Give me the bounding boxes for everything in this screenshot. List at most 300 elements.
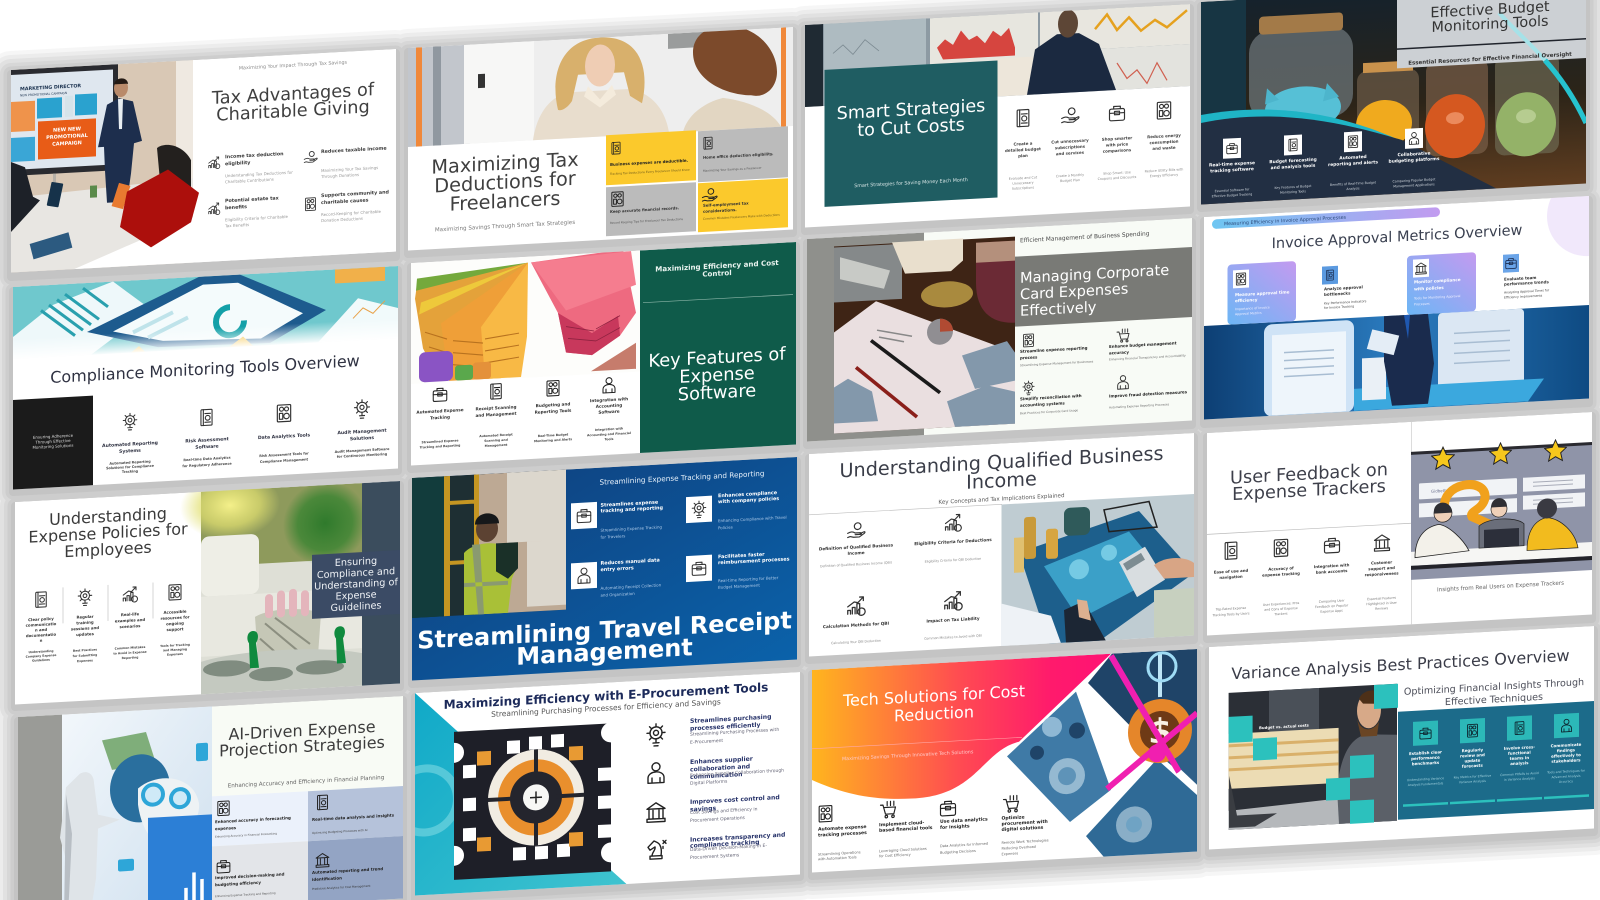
column: integration [1314, 538, 1350, 614]
column: budgeting [534, 380, 572, 443]
item: streamlines expense [571, 498, 663, 541]
column: real-life: to Avoid in Expense [113, 650, 147, 656]
illustration: documents and tablet [13, 266, 398, 360]
tile: business expenses: Business expenses are deductible. [610, 158, 689, 167]
panel: teal title box: Smart Strategies for Saving Money Each Month [854, 177, 968, 189]
column: collaborative: Comparing Popular Budget [1393, 177, 1435, 184]
column: create budget: Subscriptions [1012, 186, 1034, 191]
column: data analytics [258, 403, 310, 464]
title: Management [516, 633, 693, 671]
column: review forecasts: update [1464, 758, 1481, 763]
tile: business expenses [606, 130, 696, 185]
tile: self-employment [698, 178, 788, 232]
photo: businessman viewing charts [805, 3, 1190, 107]
panel: Tech Solutions for Cost Reduction [812, 649, 1197, 873]
panel: Tax Advantages of Charitable Giving [11, 49, 396, 273]
card: measure approval: efficiency [1235, 297, 1258, 303]
title: Deductions for [434, 167, 576, 198]
column: review forecasts: Regularly [1462, 747, 1483, 753]
column: integration: Software [598, 409, 620, 415]
item: implement cloud: Leveraging Cloud Solutions [879, 847, 927, 853]
column: accuracy: Accuracy of [1268, 565, 1294, 572]
panel: Maximizing Tax Deductions for Freelancers [408, 22, 793, 251]
tile: self-employment: Self-employment tax [703, 200, 749, 208]
column: integration: bank accounts [1316, 568, 1348, 575]
column: integration: Comparing User [1319, 599, 1344, 604]
item: optimize procurement: digital solutions [1002, 825, 1044, 833]
column: accuracy: expense tracking [1262, 571, 1300, 578]
column: accessible: Tools for Tracking [160, 642, 190, 648]
item: optimize procurement: Remote Work Technologies [1002, 838, 1049, 845]
title: Maximizing Efficiency with E-Procurement Tools [444, 680, 768, 712]
item: streamlines purchasing: Streamlining Purchasing Processes with [690, 728, 779, 738]
item: simplify: Simplify reconciliation with [1020, 393, 1082, 401]
column: integration: Tools [605, 437, 614, 441]
column: establish benchmarks [1403, 720, 1448, 807]
column: customer support: Highlighted in User [1366, 601, 1398, 606]
column: ease of use: Ease of use and [1214, 568, 1248, 575]
card: measure approval [1228, 261, 1296, 325]
card: monitor compliance: Monitor compliance [1414, 277, 1461, 285]
column: accuracy: and Cons of Expense [1264, 606, 1298, 612]
tile: automated reporting: Predictive Analytics for Cost Management [312, 884, 371, 891]
item: enhance budget: Enhancing Financial Transparency and Accountability [1109, 353, 1186, 362]
title: Income [966, 467, 1037, 494]
item: evaluate trends [1503, 252, 1550, 300]
column: integration [587, 377, 631, 442]
column: communicate findings: Advanced Analysis [1552, 774, 1581, 779]
panel: teal title box [824, 61, 998, 207]
item: streamlines purchasing: E-Procurement [690, 738, 723, 746]
item: streamlines expense: tracking and reporting [600, 505, 663, 515]
column: cross-functional: Common Pitfalls to Avoid [1500, 771, 1539, 777]
subtitle: Enhancing Accuracy and Efficiency in Financial Planning [228, 775, 385, 790]
column: create budget [1005, 109, 1041, 191]
item: reduces data errors: and Organization [600, 591, 635, 598]
column: regular training [71, 588, 99, 664]
item: potential estate tax: benefits [225, 204, 247, 211]
tile: home office [698, 126, 788, 182]
photo: calculator on digital tablet [1001, 494, 1194, 647]
photo: presenter in meeting room: PROMOTIONAL [46, 133, 89, 141]
column: data analytics: Risk Assessment Tools for [259, 451, 309, 458]
callout: compliance label: Guidelines [331, 600, 381, 614]
column: budgeting: Budgeting and [536, 401, 570, 408]
column: automated reporting: Systems [119, 448, 141, 455]
item: income tax deduction: Understanding Tax Deductions for [225, 170, 293, 178]
column: customer support: Reviews [1375, 606, 1388, 611]
callout: black side box [13, 396, 93, 490]
panel: Effective Budget Monitoring Tools [1201, 0, 1586, 205]
column: risk assessment: Risk Assessment [185, 437, 229, 445]
column: risk assessment: Software [195, 443, 219, 451]
item: definition [819, 521, 894, 568]
item: streamlines purchasing [647, 713, 779, 748]
item: evaluate trends: Evaluate team [1504, 275, 1536, 282]
panel: green side: Maximizing Efficiency and Cost [655, 258, 779, 274]
column: establish benchmarks: Establish clear [1409, 749, 1442, 756]
column: create budget: Evaluate and Cut [1009, 175, 1037, 181]
column: real-time expense: Essential Software for [1215, 187, 1249, 193]
column: establish benchmarks: Analysis Fundamentals [1408, 781, 1444, 787]
tile: improved decisions: Improved decision-making and [215, 871, 285, 880]
subtitle: Maximizing Savings Through Innovative Tech Solutions [842, 749, 974, 762]
item: enhances compliance [686, 490, 787, 532]
column: create budget: plan [1018, 153, 1028, 158]
column: clear policy: documentatio [26, 632, 56, 638]
item: analyze bottlenecks: for Invoice Tracking [1324, 304, 1354, 310]
tile: self-employment: Common Mistakes Freelancers Make with Deductions [703, 213, 780, 221]
tile: keep records: Record Keeping Tips for Freelancer Tax Deductions [610, 217, 684, 225]
panel: Understanding Qualified Business Income [809, 433, 1194, 657]
column: establish benchmarks: performance [1411, 755, 1440, 761]
column: automated reporting: Automated [1339, 155, 1367, 161]
item: improve fraud: Improve fraud detection measures [1109, 389, 1188, 399]
column: clear policy [26, 591, 57, 663]
subtitle: Streamlining Purchasing Processes for Efficiency and Savings [491, 697, 721, 719]
item: supports community: Supports community and [321, 190, 389, 199]
column: collaborative: Collaborative [1398, 151, 1430, 158]
column: automated expense: Automated Expense [416, 407, 464, 415]
column: real-time expense: Real-time expense [1209, 161, 1255, 169]
tile: real-time data: Optimizing Budgeting Processes with AI [312, 828, 368, 835]
column: cut subscriptions [1051, 107, 1089, 184]
title: Freelancers [450, 187, 560, 216]
column: integration: Accounting [596, 402, 622, 409]
callout: black side box: Ensuring Adherence [33, 433, 73, 440]
item: calculation: Calculating Your QBI Deduction [831, 639, 881, 645]
illustration: team with stars: Gidbeth [1431, 488, 1447, 494]
column: clear policy: n and [35, 627, 47, 633]
card: monitor compliance: with policies [1414, 285, 1444, 292]
photo: presenter in meeting room: NEW NEW [53, 126, 81, 134]
column: establish benchmarks: Understanding Variance [1407, 776, 1444, 782]
item: implement cloud: Implement cloud- [879, 821, 924, 828]
column: regular training: for Submitting [73, 653, 97, 658]
item: improves cost control: Improves cost control and [690, 794, 780, 806]
callout: compliance label: Ensuring [335, 556, 377, 569]
column: communicate findings: Accuracy [1559, 779, 1573, 784]
column: integration: Accounting and Financial [587, 431, 631, 437]
card: monitor compliance: Processes [1414, 302, 1430, 307]
column: automated reporting: Analysis [1346, 186, 1360, 191]
column: regular training: updates [76, 631, 95, 637]
panel: green side: Software [678, 380, 756, 405]
item: potential estate tax: Tax Benefits [224, 222, 249, 228]
column: cut subscriptions: and services [1056, 150, 1085, 156]
item: enhances supplier: Enhancing Supplier Collaboration through [690, 769, 784, 779]
item: impact [924, 590, 982, 641]
column: accuracy: Trackers [1273, 612, 1288, 616]
column: review forecasts: Key Metrics for Effective [1454, 774, 1491, 780]
panel: Variance Analysis Best Practices Overview [1209, 626, 1594, 850]
column: automated reporting: Tracking [122, 469, 139, 474]
photo: presenter in meeting room [11, 60, 193, 273]
item: simplify: Best Practices for Corporate Card Usage [1020, 408, 1078, 415]
column: integration: Integration with [590, 396, 628, 403]
item: streamlines expense: Streamlining Expense Tracking [600, 524, 662, 533]
panel: green side: Expense [679, 363, 755, 388]
column: automated reporting [102, 412, 158, 475]
illustration: gears in diamonds [1007, 649, 1197, 862]
callout: black side box: Monitoring Solutions [32, 443, 74, 450]
column: audit management [335, 398, 390, 459]
title: Maximizing Tax [431, 148, 579, 179]
column: automated reporting [1328, 130, 1378, 192]
column: budget forecasting [1269, 134, 1317, 195]
item: automate: with Automation Tools [818, 855, 857, 861]
item: automate: tracking processes [818, 830, 867, 839]
icon: stars [1432, 439, 1566, 469]
item: supports community: Record-Keeping for Charitable [321, 209, 381, 217]
subtitle: Maximizing Savings Through Smart Tax Strategies [435, 220, 575, 234]
column: receipt scanning: Management [485, 443, 508, 448]
item: increases transparency: Procurement Systems [690, 852, 740, 861]
column: customer support: Customer [1371, 559, 1392, 566]
panel: teal title box: to Cut Costs [857, 115, 965, 141]
tile: enhanced accuracy: Enhanced accuracy in forecasting [215, 815, 291, 824]
column: shop smarter: Shop smarter [1102, 135, 1132, 142]
column: communicate findings [1544, 712, 1589, 799]
kicker: Efficient Management of Business Spending [1020, 231, 1150, 244]
callout: compliance label: Compliance and [317, 566, 395, 581]
column: regular training: sessions and [71, 625, 99, 632]
title: Understanding Qualified Business [840, 442, 1163, 482]
shape: teal triangle [393, 681, 627, 897]
column: budgeting: Real-Time Budget [538, 432, 568, 438]
tile: automated reporting: Automated reporting and trend [312, 866, 383, 875]
item: income tax deduction: Income tax deduction [225, 152, 284, 160]
item: evaluate trends: Analyzing Approval Times for [1504, 288, 1549, 295]
panel: Smart Strategies to Cut Costs [805, 3, 1190, 228]
column: audit management: Audit Management [337, 429, 387, 436]
callout: compliance label: Expense [335, 589, 377, 603]
item: enhances compliance: Enhancing Compliance with Travel [718, 515, 787, 523]
column: real-life: scenarios [120, 623, 141, 629]
item: calculation [823, 595, 889, 646]
column: cut subscriptions: Cut unnecessary [1051, 138, 1089, 145]
illustration: team with stars [1411, 442, 1592, 580]
pill: kicker [1212, 207, 1440, 229]
item: implement cloud [879, 799, 933, 858]
item: automate: Streamlining Operations [818, 850, 861, 857]
column: accessible: resources for [160, 614, 190, 621]
column: regular training: Best Practices [73, 648, 97, 653]
panel: green side [640, 242, 796, 454]
column: customer support: responsiveness [1365, 570, 1399, 577]
column: ease of use [1212, 541, 1250, 617]
kicker: Maximizing Your Impact Through Tax Savings [239, 60, 348, 72]
column: receipt scanning [475, 383, 517, 448]
item: implement cloud: based financial tools [879, 825, 933, 834]
panel: teal columns [1398, 701, 1594, 820]
item: potential estate tax: Potential estate tax [225, 196, 279, 204]
item: enhance budget: Enhance budget management [1109, 340, 1176, 349]
item: eligibility: Eligibility Criteria for Deductions [914, 537, 992, 546]
item: improve fraud [1109, 372, 1188, 410]
column: ease of use: navigation [1219, 574, 1243, 580]
item: potential estate tax: Eligibility Criteria for Charitable [225, 214, 288, 222]
kicker: Streamlining Expense Tracking and Reporting [599, 469, 765, 487]
column: reduce energy: consumption [1149, 139, 1179, 145]
photo: woman reviewing documents [408, 22, 793, 147]
column: review forecasts: review and [1460, 752, 1485, 759]
title: Employees [64, 538, 152, 561]
photo: presenter in meeting room: MARKETING DIRECTOR [20, 83, 81, 93]
column: reduce energy: Reduce Utility Bills with [1145, 167, 1183, 173]
column: real-life: Common Mistakes [115, 645, 145, 651]
panel: AI-Driven Expense Projection Strategies [18, 696, 403, 900]
column: clear policy: communicatio [26, 621, 57, 628]
item: optimize procurement [1002, 794, 1049, 856]
column: communicate findings: Tools and Techniques for [1547, 769, 1585, 775]
item: improves cost control: Cost Savings and Efficiency in [690, 807, 758, 816]
column: receipt scanning: Scanning and [484, 438, 508, 443]
column: automated reporting: Benefits of Real-Time Budget [1330, 180, 1376, 187]
tile: self-employment: considerations. [703, 207, 737, 214]
panel: green side: Control [702, 268, 732, 279]
item: enhances compliance: Enhances compliance [718, 490, 777, 499]
column: reduce energy: Energy Efficiency [1150, 173, 1178, 178]
column: budgeting: Reporting Tools [535, 408, 572, 415]
photo: piggy banks in glass jars [1201, 0, 1586, 205]
column: automated expense [416, 387, 464, 450]
column: real-life [113, 586, 147, 661]
photo: warehouse worker [412, 470, 566, 618]
item: streamlines expense: Streamlines expense [600, 500, 658, 509]
column: shop smarter: Coupons and Discounts [1098, 175, 1137, 181]
tile: automated reporting: identification [312, 875, 342, 882]
item: enhances supplier: Enhances supplier [690, 756, 753, 766]
column: accessible [160, 584, 190, 657]
band: header panel: Essential Resources for Effective Financial Oversight [1408, 52, 1572, 67]
tile: real-time data [308, 786, 403, 841]
column: clear policy: Company Expense [26, 653, 56, 659]
title: Charitable Giving [216, 97, 370, 126]
card: measure approval: Importance of Invoice [1235, 305, 1270, 311]
column: integration: Expense Apps [1320, 609, 1343, 614]
column: risk assessment [182, 408, 232, 468]
item: enhances supplier: collaboration and [690, 763, 750, 774]
column: automated reporting: Solutions for Compliance [106, 464, 155, 470]
column: reduce energy: and waste [1152, 145, 1176, 151]
column: data analytics: Data Analytics Tools [258, 432, 310, 441]
column: review forecasts: Variance Analysis [1459, 779, 1486, 784]
item: streamline: Streamline expense reporting [1020, 345, 1087, 354]
column: communicate findings: stakeholders [1551, 757, 1581, 764]
item: enhance budget [1109, 326, 1186, 362]
card: monitor compliance: Tools for Monitoring Approval [1414, 294, 1460, 301]
column: review forecasts [1450, 717, 1495, 804]
item: streamlines purchasing: processes efficiently [690, 722, 760, 733]
column: clear policy: Guidelines [32, 658, 50, 663]
column: communicate findings: Communicate [1551, 742, 1581, 748]
column: create budget: detailed budget [1005, 146, 1041, 153]
item: data analytics [940, 799, 988, 855]
item: potential estate tax [209, 195, 288, 229]
title: User Feedback on [1230, 460, 1388, 489]
card: measure approval: Measure approval time [1235, 289, 1289, 297]
item: facilitates reimbursement: Facilitates faster [718, 552, 765, 560]
band: header panel [1397, 0, 1586, 133]
column: collaborative [1389, 127, 1440, 189]
column: budgeting: Monitoring and Alerts [534, 437, 572, 443]
column: receipt scanning: and Management [475, 411, 517, 418]
callout: compliance label [312, 550, 400, 619]
column: clear policy: Understanding [28, 649, 54, 654]
tile: business expenses: Tracking Tax Deductions Every Freelancer Should Know [609, 168, 690, 176]
item: streamline: Streamlining Expense Management for Businesses [1020, 359, 1094, 367]
column: cross-functional: Involve cross- [1504, 744, 1535, 751]
card: monitor compliance [1407, 252, 1476, 315]
column: customer support: support and [1368, 565, 1395, 571]
column: accessible: and Managing [163, 647, 187, 652]
item: analyze bottlenecks: bottlenecks [1324, 290, 1351, 297]
item: facilitates reimbursement: reimbursement processes [718, 556, 790, 566]
item: data analytics: Data Analytics for Informed [940, 842, 988, 848]
panel: Key Features of Expense Software [411, 240, 796, 466]
column: customer support: Essential Features [1367, 596, 1396, 601]
column: customer support [1365, 534, 1399, 611]
item: optimize procurement: Expenses [1002, 851, 1018, 856]
column: accessible: Accessible [164, 609, 186, 615]
column: clear policy: Clear policy [28, 616, 54, 622]
item: streamlines purchasing: Streamlines purchasing [690, 714, 771, 725]
item: definition: Definition of Qualified Business Income (QBI) [820, 560, 892, 568]
item: simplify [1020, 378, 1082, 415]
band: header panel: Monitoring Tools [1431, 14, 1549, 36]
tile: home office: Maximizing Your Savings as a Freelancer [703, 166, 762, 173]
item: analyze bottlenecks: Analyze approval [1324, 284, 1363, 291]
column: create budget: Unnecessary [1012, 181, 1034, 186]
column: accessible: ongoing [166, 620, 184, 626]
item: income tax deduction [209, 151, 293, 185]
column: cross-functional: teams in [1510, 755, 1529, 761]
item: reduces taxable income: Reduces taxable income [321, 145, 387, 155]
title band [1015, 247, 1192, 327]
tile: keep records [606, 182, 696, 236]
item: evaluate trends: performance trends [1504, 279, 1549, 287]
column: audit management: for Continuous Monitoring [337, 452, 388, 459]
column: automated reporting: reporting and alerts [1328, 159, 1378, 168]
item: streamline: process [1020, 354, 1038, 360]
column: risk assessment: for Regulatory Adherence [182, 462, 232, 468]
column: integration: Integration with [595, 426, 623, 432]
column: cross-functional: functional [1508, 750, 1531, 756]
panel: Understanding Expense Policies for Employees [15, 462, 400, 705]
column: automated reporting: Automated Reporting [102, 441, 158, 449]
illustration: robot head and figure [60, 706, 212, 900]
subtitle: Optimizing Financial Insights Through [1404, 677, 1584, 698]
item: improves cost control: Procurement Operations [690, 815, 746, 824]
column: cut subscriptions: Budget Plan [1060, 178, 1080, 183]
item: streamlines expense: for Travelers [600, 533, 625, 540]
column: automated expense: Streamlined Expense [422, 438, 458, 444]
column: clear policy: n [40, 638, 43, 643]
column: collaborative: Management Applications [1393, 182, 1435, 189]
column: real-time expense [1209, 137, 1255, 199]
title: Expense Trackers [1232, 477, 1386, 505]
column: shop smarter: Shop Smart: Use [1103, 170, 1131, 176]
column: cross-functional: in Variance Analysis [1504, 776, 1535, 782]
column: cross-functional [1497, 715, 1542, 802]
item: facilitates reimbursement [686, 550, 790, 592]
tile: enhanced accuracy [212, 791, 308, 846]
illustration: businessman with documents [1204, 305, 1589, 420]
title: Expense Policies for [28, 519, 188, 547]
title: Invoice Approval Metrics Overview [1272, 223, 1522, 252]
item: impact: Impact on Tax Liability [926, 616, 980, 624]
